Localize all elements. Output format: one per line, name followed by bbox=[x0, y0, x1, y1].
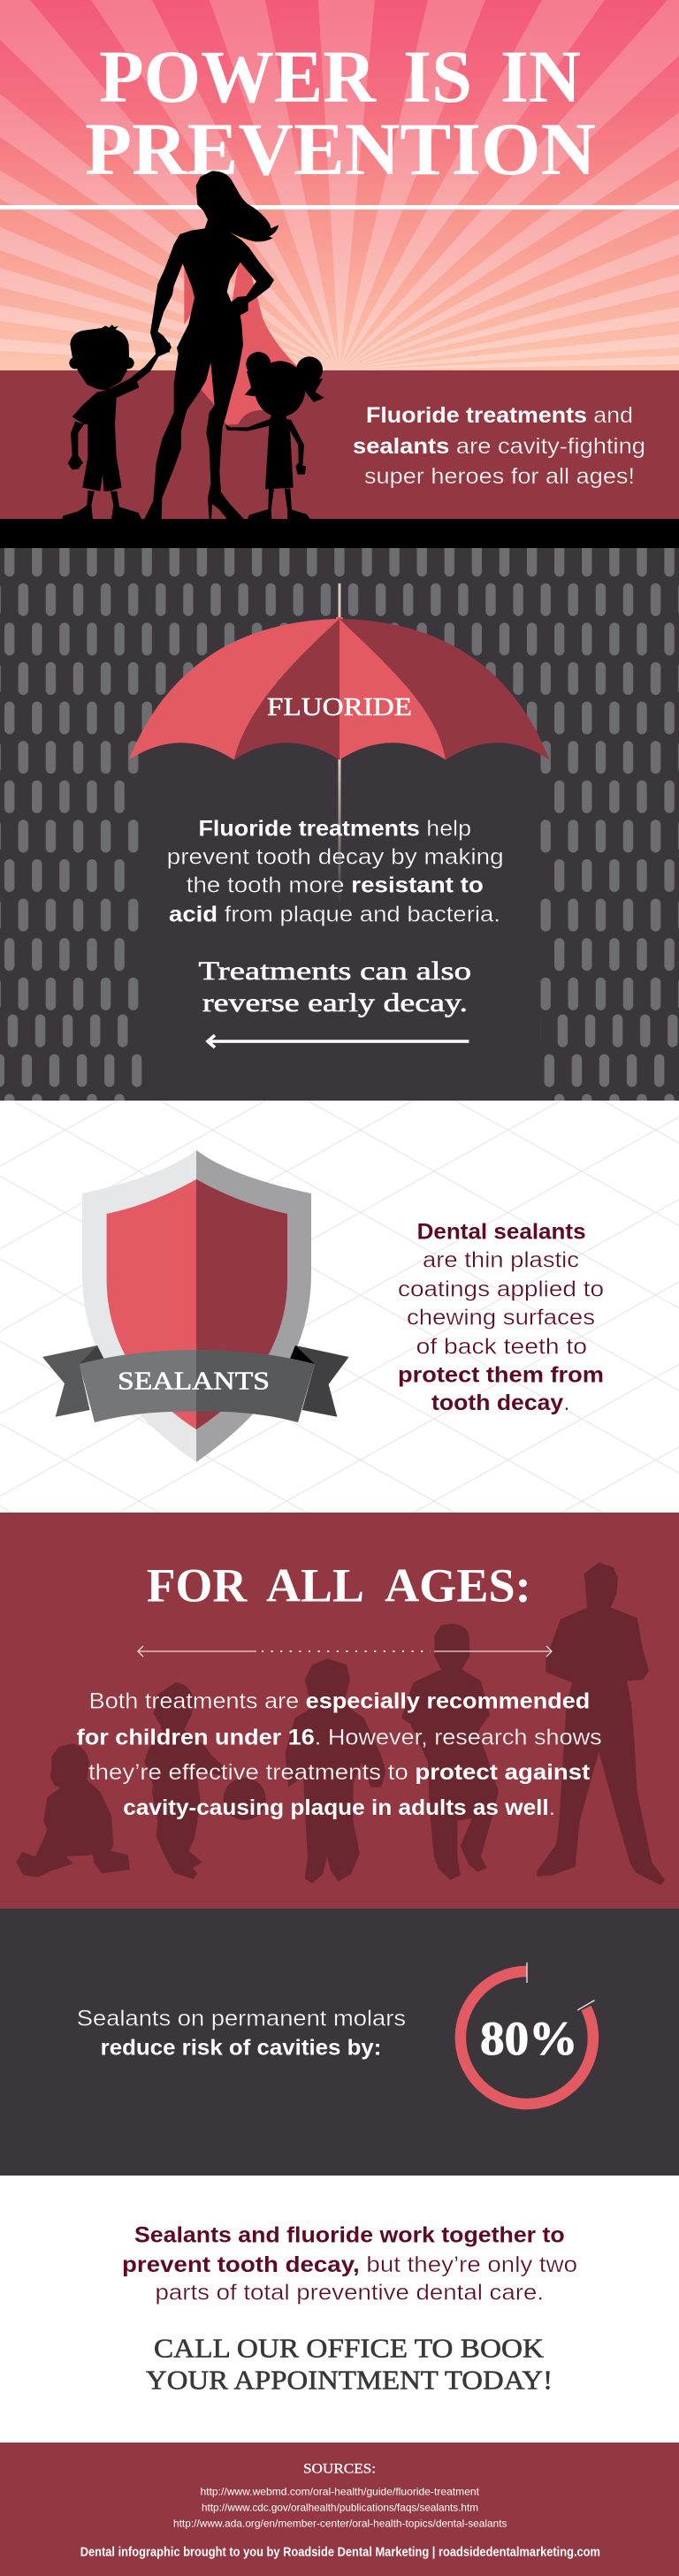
ribbon label: SEALANTS bbox=[118, 1368, 270, 1396]
title: IS bbox=[403, 35, 472, 118]
icon: umbrella bbox=[129, 583, 550, 905]
title bbox=[85, 35, 596, 191]
ages text: for children under 16 . However, research shows bbox=[77, 1725, 602, 1749]
fluoride text: prevent tooth decay by making bbox=[167, 845, 504, 870]
superhero family silhouette bbox=[62, 171, 324, 519]
people silhouettes bbox=[16, 1562, 665, 1886]
heading: ALL bbox=[266, 1559, 364, 1612]
panel: call to action bbox=[0, 2176, 679, 2443]
summary text bbox=[122, 2223, 577, 2305]
panel: sealants bbox=[0, 1101, 679, 1513]
title: IN bbox=[500, 35, 581, 118]
source links: http://www.webmd.com/oral-health/guide/fluoride-treatment bbox=[200, 2486, 480, 2498]
reversal callout bbox=[198, 956, 471, 1017]
title: POWER bbox=[99, 35, 378, 118]
background bbox=[0, 1909, 679, 2176]
sealants text: of back teeth to bbox=[416, 1335, 587, 1360]
ages text: cavity-causing plaque in adults as well . bbox=[123, 1795, 555, 1820]
sealants text: chewing surfaces bbox=[407, 1305, 595, 1330]
fluoride text bbox=[167, 816, 504, 927]
fluoride text: Fluoride treatments help bbox=[198, 816, 471, 841]
hero text bbox=[353, 403, 645, 489]
statistic text: Sealants on permanent molars bbox=[77, 2007, 406, 2031]
maroon band bbox=[0, 370, 679, 519]
panel: hero bbox=[0, 0, 679, 549]
cape bbox=[184, 261, 309, 425]
panel: statistic bbox=[0, 1909, 679, 2176]
ground bbox=[0, 519, 679, 549]
older child bbox=[401, 1624, 499, 1880]
icon: shield with ribbon bbox=[42, 1150, 349, 1462]
girl bbox=[225, 352, 324, 519]
hero text: sealants are cavity-fighting bbox=[353, 434, 645, 459]
summary text: Sealants and fluoride work together to bbox=[134, 2223, 565, 2248]
chart: 80 percent ring bbox=[461, 1962, 594, 2104]
source links bbox=[173, 2486, 507, 2530]
background bbox=[0, 2443, 679, 2576]
background bbox=[0, 1101, 679, 1513]
sealants text bbox=[398, 1220, 604, 1415]
divider line bbox=[0, 205, 679, 210]
fluoride text: acid from plaque and bacteria. bbox=[169, 903, 500, 927]
baby bbox=[16, 1743, 130, 1877]
panel: fluoride bbox=[0, 548, 679, 1101]
child with ball bbox=[144, 1682, 266, 1879]
child bbox=[286, 1658, 385, 1884]
ages text: Both treatments are especially recommended bbox=[89, 1689, 590, 1714]
reversal callout: Treatments can also bbox=[198, 956, 471, 986]
sealants text: tooth decay . bbox=[431, 1391, 570, 1415]
heading: AGES: bbox=[385, 1559, 531, 1612]
hero text: super heroes for all ages! bbox=[364, 464, 635, 489]
hero text: Fluoride treatments and bbox=[366, 403, 633, 428]
sealants text: are thin plastic bbox=[423, 1247, 579, 1272]
fluoride text: the tooth more resistant to bbox=[187, 873, 484, 898]
heading: FOR bbox=[147, 1559, 248, 1612]
summary text: prevent tooth decay, but they’re only two bbox=[122, 2252, 577, 2277]
rain pattern bbox=[0, 548, 679, 1101]
ages text: they’re effective treatments to protect against bbox=[88, 1760, 591, 1785]
background bbox=[0, 2176, 679, 2443]
boy bbox=[62, 324, 172, 519]
sunburst background bbox=[0, 0, 679, 370]
statistic text bbox=[77, 2007, 406, 2060]
sealants text: protect them from bbox=[398, 1362, 604, 1387]
arrow: age range bbox=[138, 1646, 552, 1657]
credit line: Dental infographic brought to you by Roadside Dental Marketing | roadsidedentalmarketing.com bbox=[80, 2546, 600, 2560]
adult bbox=[537, 1562, 665, 1886]
background bbox=[0, 1513, 679, 1909]
umbrella label: FLUORIDE bbox=[267, 693, 412, 721]
sealants text: coatings applied to bbox=[398, 1277, 604, 1302]
value: 80% bbox=[480, 2012, 577, 2065]
sources heading: SOURCES: bbox=[303, 2462, 376, 2477]
source links: http://www.ada.org/en/member-center/oral-health-topics/dental-sealants bbox=[173, 2518, 507, 2530]
panel: footer bbox=[0, 2443, 679, 2576]
call to action heading: CALL OUR OFFICE TO BOOK bbox=[154, 2333, 545, 2364]
reversal callout: reverse early decay. bbox=[202, 988, 468, 1017]
panel: for all ages bbox=[0, 1513, 679, 1909]
source links: http://www.cdc.gov/oralhealth/publications/faqs/sealants.htm bbox=[202, 2502, 478, 2514]
call to action heading bbox=[146, 2333, 553, 2396]
summary text: parts of total preventive dental care. bbox=[156, 2281, 544, 2305]
background bbox=[0, 548, 679, 1101]
sealants text: Dental sealants bbox=[417, 1220, 586, 1245]
arrow: left bbox=[208, 1035, 469, 1048]
title: PREVENTION bbox=[85, 108, 596, 191]
call to action heading: YOUR APPOINTMENT TODAY! bbox=[146, 2365, 553, 2396]
ages text bbox=[77, 1689, 602, 1820]
statistic text: reduce risk of cavities by: bbox=[101, 2035, 381, 2060]
mother bbox=[144, 171, 278, 519]
heading bbox=[147, 1559, 531, 1612]
